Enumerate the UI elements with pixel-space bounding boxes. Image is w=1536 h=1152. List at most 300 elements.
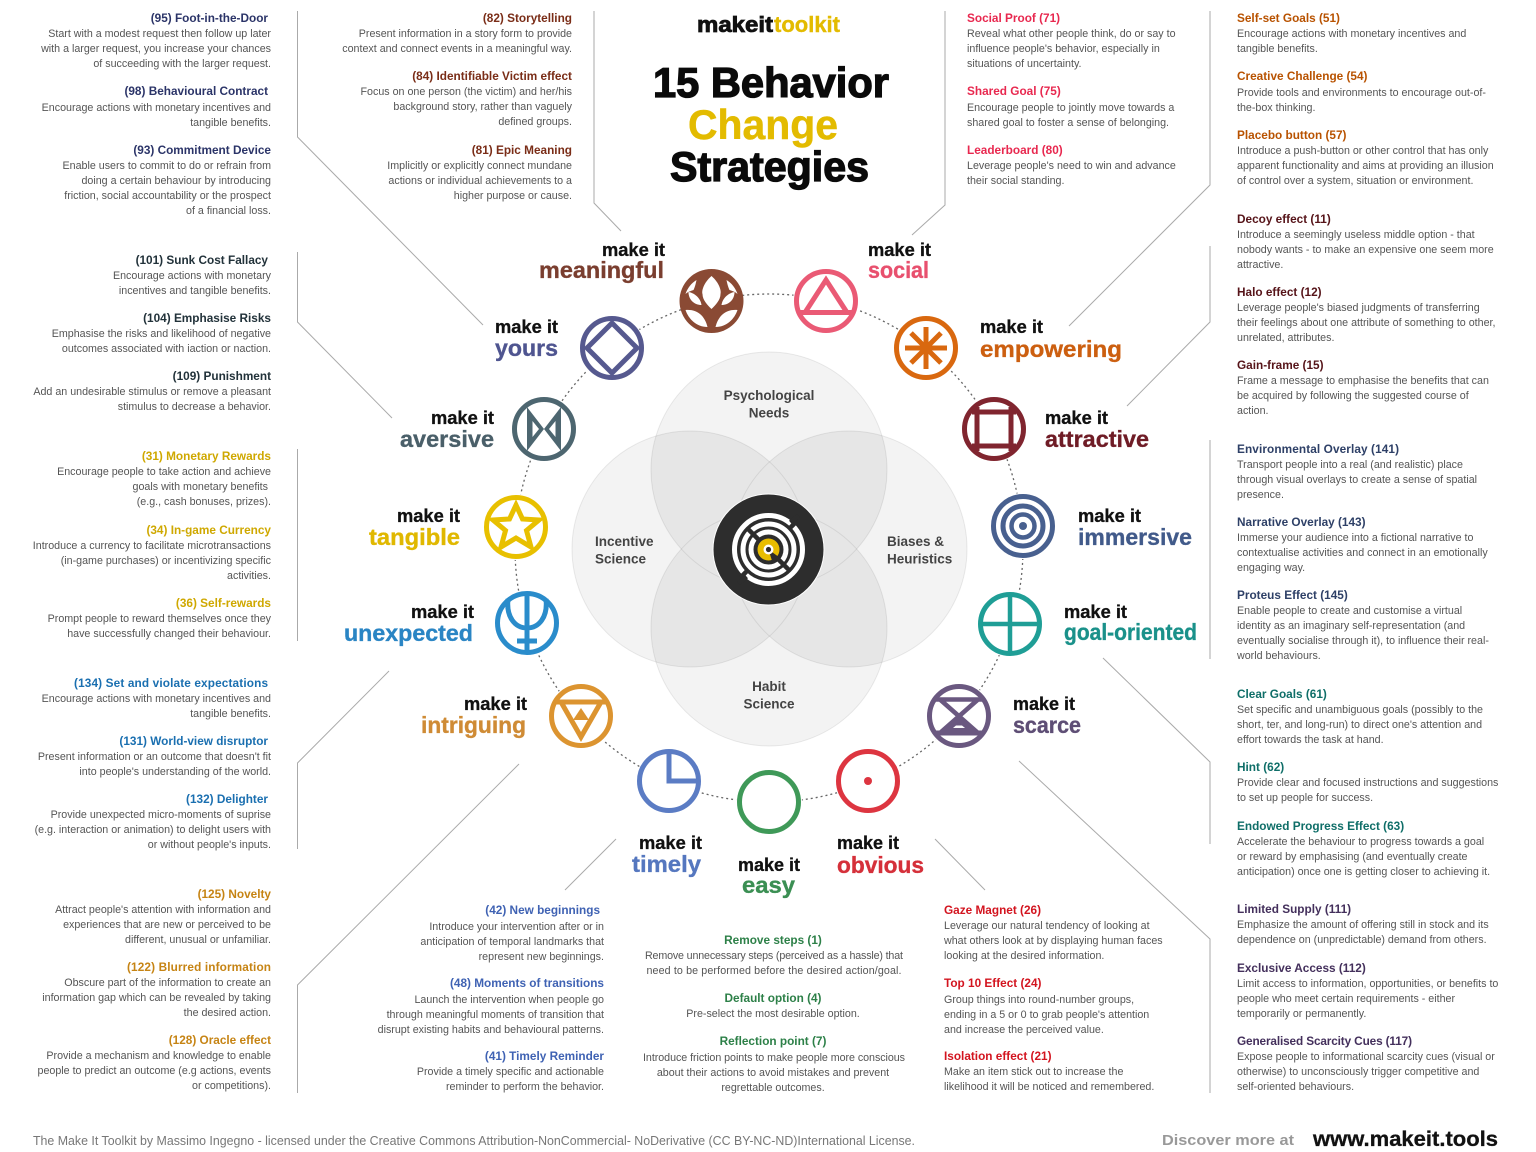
strategy: Foot-in-the-Door: Start with a modest request then follow up later [48,28,271,40]
label: make it goal-oriented [1064,602,1197,645]
label: make it immersive [1078,506,1192,550]
panel: scarce strategies [1237,902,1498,1093]
strategy: Endowed Progress Effect: anticipation) once one is getting closer to achieving it. [1237,866,1490,878]
strategy: Top 10 Effect: and increase the perceived value. [944,1024,1104,1036]
strategy: Identifiable Victim effect [361,69,573,128]
strategy: Timely Reminder: Provide a timely specific and actionable [417,1066,604,1078]
strategy: Moments of transitions: (48) Moments of transitions [450,976,604,990]
strategy: Commitment Device: Enable users to commit to do or refrain from [62,160,271,172]
strategy: New beginnings: (42) New beginnings [485,903,600,917]
title: Change [688,101,838,148]
strategy: Novelty: different, unusual or unfamiliar. [125,934,271,946]
label: make it meaningful [539,240,665,283]
leader line: yours [298,11,483,325]
strategy: Self-set Goals: Encourage actions with monetary incentives and [1237,28,1466,40]
strategy: Commitment Device: of a financial loss. [186,205,271,217]
strategy: Environmental Overlay: Environmental Overlay (141) [1237,442,1399,456]
venn label: incentive science: Science [595,552,647,566]
label: make it aversive [400,408,494,452]
strategy: Novelty: (125) Novelty [198,887,271,901]
leader line: meaningful [594,11,621,231]
strategy: Isolation effect: Isolation effect (21) [944,1049,1052,1063]
strategy: Sunk Cost Fallacy: Encourage actions with monetary [113,270,272,282]
label: make it yours: make it [495,317,558,337]
strategy: Leaderboard: Leaderboard (80) [967,143,1063,157]
strategy: Limited Supply: dependence on (unpredictable) demand from others. [1237,934,1487,946]
strategy: Epic Meaning [387,143,572,202]
label: make it obvious: obvious [837,852,924,878]
label: make it empowering [980,317,1122,362]
strategy: Monetary Rewards: (31) Monetary Rewards [142,449,271,463]
label: make it social: social [868,257,929,283]
strategy: Punishment [33,369,271,413]
icon: meaningful lotus [680,269,744,333]
strategy: Environmental Overlay: through visual overlays to create a sense of spatial [1237,474,1477,486]
label: make it meaningful: meaningful [539,257,664,283]
strategy: Isolation effect: Make an item stick out to increase the [944,1066,1123,1078]
strategy: Clear Goals: Clear Goals (61) [1237,687,1327,701]
strategy: Halo effect [1237,285,1495,344]
strategy: Gain-frame: be acquired by following the suggested course of [1237,390,1469,402]
panel: aversive strategies [33,253,272,413]
icon: yours diamond [579,315,645,381]
strategy: Behavioural Contract [42,84,271,129]
strategy: Behavioural Contract: tangible benefits. [190,117,271,129]
label: make it intriguing: intriguing [421,712,526,738]
strategy: Endowed Progress Effect: or reward by emphasising (and eventually create [1237,851,1468,863]
footer: discover more: Discover more at [1162,1132,1294,1149]
leader line: unexpected [298,671,389,849]
strategy: Blurred information: Obscure part of the information to create an [64,977,271,989]
label: make it intriguing: make it [464,694,527,714]
strategy: Environmental Overlay [1237,442,1477,501]
label: make it meaningful: make it [602,240,665,260]
strategy: Clear Goals [1237,687,1483,746]
title: Strategies [670,143,869,190]
icon: aversive bowtie [511,396,577,462]
strategy: Moments of transitions: disrupt existing habits and behavioural patterns. [378,1024,604,1036]
label: make it unexpected: unexpected [344,620,473,646]
strategy: New beginnings: represent new beginnings. [479,951,604,963]
strategy: Default option: Pre-select the most desirable option. [686,1008,860,1020]
strategy: Social Proof [967,11,1176,70]
strategy: Epic Meaning: higher purpose or cause. [454,190,572,202]
strategy: Blurred information [42,960,271,1019]
icon: social triangle [793,268,859,334]
strategy: Remove steps: Remove unnecessary steps (perceived as a hassle) that [645,950,903,962]
strategy: Identifiable Victim effect: Focus on one person (the victim) and her/his [361,86,572,98]
label: make it easy: easy [742,872,795,898]
strategy: Identifiable Victim effect: background story, rather than vaguely [393,101,573,113]
leader line: aversive [298,252,392,418]
icon: obvious dot [835,748,901,814]
label: make it goal-oriented: goal-oriented [1064,619,1197,645]
strategy: In-game Currency: (34) In-game Currency [146,523,271,537]
strategy: Clear Goals: Set specific and unambiguous goals (possibly to the [1237,704,1483,716]
strategy: Commitment Device: doing a certain behaviour by introducing [81,175,271,187]
strategy: Timely Reminder [417,1049,604,1093]
strategy: Epic Meaning: Implicitly or explicitly connect mundane [387,160,572,172]
strategy: Behavioural Contract: Encourage actions with monetary incentives and [42,102,271,114]
strategy: Gain-frame: Gain-frame (15) [1237,358,1324,372]
strategy: Novelty [55,887,271,946]
strategy: Top 10 Effect [944,976,1149,1036]
strategy: Placebo button: Introduce a push-button or other control that has only [1237,145,1489,157]
leader line: social [912,11,945,235]
panel: timely strategies [378,903,604,1093]
strategy: Decoy effect: nobody wants - to make an expensive one seem more [1237,244,1494,256]
label: make it timely [632,833,702,877]
strategy: Social Proof: influence people's behavior, especially in [967,43,1160,55]
icon: attractive square [961,396,1027,462]
icon: goal-oriented cross [977,591,1043,657]
label: make it social [868,240,931,283]
strategy: Proteus Effect: Enable people to create and customise a virtual [1237,605,1462,617]
panel: intriguing strategies [38,887,271,1092]
leader line: intriguing [298,764,519,1093]
strategy: Sunk Cost Fallacy: (101) Sunk Cost Fallacy [136,253,268,267]
strategy: Commitment Device [62,143,271,217]
strategy: Hint [1237,760,1498,804]
strategy: Identifiable Victim effect: (84) Identifiable Victim effect [412,69,572,83]
strategy: Gaze Magnet: Leverage our natural tendency of looking at [944,920,1150,932]
panel: attractive strategies [1237,212,1495,417]
strategy: Storytelling: (82) Storytelling [483,11,572,25]
panel: tangible strategies [33,449,272,640]
label: make it timely: timely [632,851,701,877]
icon: easy circle [736,769,802,835]
strategy: Reflection point: about their actions to avoid mistakes and prevent [657,1067,889,1079]
strategy: Decoy effect: Decoy effect (11) [1237,212,1331,226]
strategy: Environmental Overlay: presence. [1237,489,1284,501]
strategy: Reflection point: Introduce friction points to make people more conscious [643,1052,905,1064]
strategy: Foot-in-the-Door [40,11,271,70]
strategy: Proteus Effect: world behaviours. [1236,650,1321,662]
strategy: Epic Meaning: actions or individual achievements to a [388,175,572,187]
icon: immersive target [990,493,1056,559]
strategy: Gaze Magnet: looking at the desired information. [944,950,1104,962]
venn label: incentive science: Incentive [595,534,654,549]
strategy: In-game Currency: (in-game purchases) or incentivizing specific [61,555,272,567]
strategy: Generalised Scarcity Cues: Expose people to informational scarcity cues (visual or [1237,1051,1495,1063]
logo: makeit [697,12,774,37]
icon: empowering asterisk [893,315,959,381]
strategy: Generalised Scarcity Cues: self-oriented behaviours. [1237,1081,1354,1093]
strategy: Creative Challenge: Creative Challenge (54) [1237,69,1368,83]
strategy: Blurred information: (122) Blurred information [127,960,271,974]
panel: yours strategies [40,11,271,217]
strategy: Storytelling: Present information in a story form to provide [359,28,572,40]
strategy: Exclusive Access: people who meet certain requirements - either [1237,993,1455,1005]
strategy: Decoy effect: attractive. [1237,259,1283,271]
strategy: Gain-frame: Frame a message to emphasise the benefits that can [1237,375,1489,387]
label: make it empowering: make it [980,317,1043,337]
strategy: Endowed Progress Effect [1237,819,1490,878]
strategy: Oracle effect [38,1033,271,1092]
strategy: Leaderboard: Leverage people's need to win and advance [967,160,1176,172]
strategy: Halo effect: their feelings about one attribute of something to other, [1237,317,1495,329]
label: make it immersive: immersive [1078,524,1192,550]
strategy: Moments of transitions: Launch the intervention when people go [414,994,604,1006]
label: make it attractive: make it [1045,408,1108,428]
strategy: Commitment Device: friction, social accountability or the prospect [64,190,271,202]
label: make it tangible [369,506,460,550]
label: make it social: make it [868,240,931,260]
strategy: New beginnings: Introduce your intervention after or in [429,921,604,933]
strategy: Shared Goal: Shared Goal (75) [967,84,1061,98]
strategy: Foot-in-the-Door: with a larger request, you increase your chances [40,43,271,55]
strategy: Decoy effect [1237,212,1494,271]
strategy: Emphasise Risks: (104) Emphasise Risks [143,311,271,325]
label: make it yours: yours [495,335,558,361]
title: 15 Behavior [653,59,889,106]
strategy: Self-rewards: (36) Self-rewards [176,596,271,610]
strategy: Oracle effect: people to predict an outcome (e.g actions, events [38,1065,271,1077]
strategy: Remove steps [645,933,903,977]
strategy: New beginnings: anticipation of temporal landmarks that [420,936,604,948]
panel: empowering strategies [1237,11,1494,187]
panel: immersive strategies [1236,442,1489,662]
label: make it unexpected [344,602,474,646]
leader line: immersive [1209,440,1211,659]
strategy: In-game Currency: activities. [227,570,271,582]
strategy: Top 10 Effect: ending in a 5 or 0 to grab people's attention [944,1009,1149,1021]
strategy: Exclusive Access: temporarily or permanently. [1237,1008,1366,1020]
strategy: Monetary Rewards: goals with monetary benefits [133,481,268,493]
strategy: Hint: to set up people for success. [1237,792,1373,804]
strategy: Delighter: (132) Delighter [186,792,268,806]
strategy: Delighter: or without people's inputs. [148,839,271,851]
strategy: Blurred information: information gap which can be revealed by taking [42,992,271,1004]
strategy: Sunk Cost Fallacy: incentives and tangible benefits. [119,285,271,297]
strategy: World-view disruptor: (131) World-view disruptor [119,734,268,748]
label: make it scarce [1013,694,1081,738]
strategy: Oracle effect: Provide a mechanism and knowledge to enable [46,1050,271,1062]
leader line: empowering [1069,11,1210,326]
venn label: psychological needs: Psychological [724,388,814,403]
strategy: Endowed Progress Effect: Accelerate the behaviour to progress towards a goal [1237,836,1484,848]
strategy: Halo effect: Halo effect (12) [1237,285,1322,299]
leader line: tangible [296,449,298,641]
icon: timely clock [636,748,702,814]
strategy: Hint: Provide clear and focused instructions and suggestions [1237,777,1498,789]
strategy: In-game Currency: Introduce a currency to facilitate microtransactions [33,540,271,552]
strategy: World-view disruptor: into people's understanding of the world. [79,766,271,778]
strategy: Narrative Overlay: Narrative Overlay (143) [1237,515,1366,529]
strategy: Self-rewards: have successfully changed their behaviour. [67,628,271,640]
strategy: Self-rewards: Prompt people to reward themselves once they [48,613,272,625]
strategy: Foot-in-the-Door: of succeeding with the larger request. [93,58,271,70]
strategy: Isolation effect [944,1049,1154,1093]
strategy: Limited Supply: Limited Supply (111) [1237,902,1351,916]
strategy: Narrative Overlay: Immerse your audience into a fictional narrative to [1237,532,1473,544]
logo: toolkit [774,12,841,37]
panel: social strategies [967,11,1176,187]
strategy: Creative Challenge [1237,69,1486,114]
strategy: Generalised Scarcity Cues: otherwise) to unconsciously trigger competitive and [1237,1066,1479,1078]
footer: website: www.makeit.tools [1312,1128,1498,1151]
strategy: Clear Goals: effort towards the task at hand. [1237,734,1384,746]
strategy: World-view disruptor [38,734,271,778]
label: make it scarce: make it [1013,694,1075,714]
strategy: Placebo button: Placebo button (57) [1237,128,1347,142]
venn diagram [572,352,967,746]
strategy: Narrative Overlay: engaging way. [1237,562,1305,574]
strategy: Timely Reminder: reminder to perform the behavior. [446,1081,604,1093]
center maze emblem [712,494,824,606]
strategy: Behavioural Contract: (98) Behavioural Contract [124,84,268,98]
strategy: Foot-in-the-Door: (95) Foot-in-the-Door [151,11,268,25]
strategy: Punishment: (109) Punishment [173,369,271,383]
strategy: Social Proof: situations of uncertainty. [967,58,1081,70]
strategy: Default option [686,991,860,1020]
strategy: New beginnings [420,903,604,963]
label: make it obvious: make it [837,833,899,853]
label: make it attractive: attractive [1045,426,1149,452]
label: make it intriguing [421,694,527,738]
strategy: World-view disruptor: Present information or an outcome that doesn't fit [38,751,271,763]
strategy: Moments of transitions: through meaningful moments of transition that [387,1009,604,1021]
label: make it aversive: make it [431,408,494,428]
label: make it goal-oriented: make it [1064,602,1127,622]
strategy: Generalised Scarcity Cues: Generalised Scarcity Cues (117) [1237,1034,1412,1048]
strategy: Novelty: Attract people's attention with information and [55,904,271,916]
venn label: habit science: Habit [752,679,786,694]
strategy: Social Proof: Social Proof (71) [967,11,1060,25]
strategy: Monetary Rewards: (e.g., cash bonuses, prizes). [137,496,271,508]
strategy: Delighter: (e.g. interaction or animation) to delight users with [35,824,271,836]
strategy: Top 10 Effect: Group things into round-number groups, [944,994,1134,1006]
strategy: Punishment: Add an undesirable stimulus or remove a pleasant [33,386,271,398]
strategy: Emphasise Risks: Emphasise the risks and likelihood of negative [52,328,271,340]
strategy: Gain-frame: action. [1237,405,1268,417]
panel: easy strategies [643,933,905,1094]
strategy: Default option: Default option (4) [724,991,822,1005]
strategy: Set and violate expectations: tangible benefits. [190,708,271,720]
label: make it easy: make it [738,855,800,875]
strategy: Gaze Magnet: what others look at by displaying human faces [943,935,1163,947]
strategy: Self-set Goals: Self-set Goals (51) [1237,11,1340,25]
strategy: Remove steps: Remove steps (1) [724,933,822,947]
leader line: attractive [1127,246,1210,406]
strategy: Emphasise Risks: outcomes associated with iaction or naction. [62,343,271,355]
label: make it tangible: tangible [369,524,460,550]
strategy: Gaze Magnet: Gaze Magnet (26) [944,903,1041,917]
strategy: Exclusive Access [1237,961,1498,1020]
strategy: Gaze Magnet [943,903,1163,962]
icon: tangible star [483,494,549,560]
label: make it yours [495,317,558,361]
panel: goal-oriented strategies [1237,687,1498,878]
strategy: In-game Currency [33,523,272,582]
strategy: Oracle effect: (128) Oracle effect [169,1033,271,1047]
strategy: Moments of transitions [378,976,604,1036]
strategy: Storytelling: context and connect events in a meaningful way. [342,43,572,55]
label: make it empowering: empowering [980,336,1122,362]
label: make it scarce: scarce [1013,712,1081,738]
strategy: Proteus Effect [1236,588,1489,662]
icon: intriguing triangles [548,683,614,749]
label: make it tangible: make it [397,506,460,526]
panel: obvious strategies [943,903,1163,1093]
strategy: Novelty: experiences that are new or perceived to be [63,919,271,931]
strategy: Exclusive Access: Exclusive Access (112) [1237,961,1366,975]
strategy: Monetary Rewards: Encourage people to take action and achieve [57,466,271,478]
strategy: Environmental Overlay: Transport people into a real (and realistic) place [1237,459,1463,471]
strategy: Narrative Overlay: contextualise activities and connect in an emotionally [1237,547,1488,559]
panel: unexpected strategies [35,676,271,851]
leader line: obvious [935,839,985,890]
strategy: Hint: Hint (62) [1237,760,1284,774]
strategy: Delighter: Provide unexpected micro-moments of suprise [51,809,271,821]
strategy: Social Proof: Reveal what other people think, do or say to [967,28,1176,40]
venn label: psychological needs: Needs [749,406,789,420]
strategy: Punishment: stimulus to decrease a behavior. [118,401,271,413]
strategy: Self-rewards [48,596,272,640]
strategy: Delighter [35,792,271,851]
strategy: Reflection point [643,1034,905,1094]
strategy: Oracle effect: or competitions). [192,1080,271,1092]
label: make it easy [738,855,800,898]
title [653,59,889,190]
strategy: Halo effect: Leverage people's biased judgments of transferring [1237,302,1480,314]
strategy: Proteus Effect: Proteus Effect (145) [1237,588,1348,602]
leader line: scarce [1019,761,1210,1093]
strategy: Remove steps: need to be performed before the desired action/goal. [646,965,902,977]
strategy: Proteus Effect: eventually socialise through it), to influence their real- [1237,635,1489,647]
strategy: Shared Goal [967,84,1174,129]
strategy: Leaderboard [967,143,1176,187]
strategy: Placebo button: apparent functionality and aims at providing an illusion [1237,160,1494,172]
venn label: biases and heuristics: Heuristics [887,552,952,566]
strategy: Endowed Progress Effect: Endowed Progress Effect (63) [1237,819,1404,833]
leader line: timely [565,839,616,890]
strategy: Clear Goals: short, ter, and long-run) to direct one's attention and [1237,719,1482,731]
strategy: Narrative Overlay [1237,515,1488,574]
strategy: Blurred information: the desired action. [184,1007,271,1019]
strategy: Placebo button: of control over a system, situation or environment. [1237,175,1473,187]
icon: scarce hourglass [926,683,992,749]
strategy: Placebo button [1237,128,1494,187]
label: make it immersive: make it [1078,506,1141,526]
strategy: Shared Goal: shared goal to foster a sense of belonging. [967,117,1169,129]
strategy: Shared Goal: Encourage people to jointly move towards a [967,102,1174,114]
label: make it obvious [837,833,924,878]
footer: license: The Make It Toolkit by Massimo Ingegno - licensed under the Creative Commons Attribution-NonCommercial- NoDerivative (CC BY-NC-ND)International License. [33,1133,915,1148]
strategy: Decoy effect: Introduce a seemingly useless middle option - that [1237,229,1475,241]
label: make it aversive: aversive [400,426,494,452]
strategy: Generalised Scarcity Cues [1237,1034,1495,1093]
strategy: Emphasise Risks [52,311,271,355]
strategy: Gain-frame [1237,358,1489,417]
strategy: Proteus Effect: identity as an imaginary self-representation (and [1237,620,1465,632]
strategy: Halo effect: unrelated, attributes. [1237,332,1334,344]
strategy: Commitment Device: (93) Commitment Device [133,143,271,157]
strategy: Set and violate expectations: Encourage actions with monetary incentives and [42,693,271,705]
strategy: Sunk Cost Fallacy [113,253,272,297]
strategy: Storytelling [342,11,572,55]
strategy: Epic Meaning: (81) Epic Meaning [472,143,572,157]
strategy: Self-set Goals: tangible benefits. [1237,43,1318,55]
icon: unexpected neptune [494,590,560,656]
strategy: Self-set Goals [1237,11,1466,55]
strategy: Top 10 Effect: Top 10 Effect (24) [944,976,1042,990]
strategy: Monetary Rewards [57,449,271,508]
strategy: Creative Challenge: Provide tools and environments to encourage out-of- [1237,87,1486,99]
panel: meaningful strategies [342,11,573,202]
leader line: goal-oriented [1103,658,1210,844]
dotted ring connecting the strategies [515,294,1023,802]
